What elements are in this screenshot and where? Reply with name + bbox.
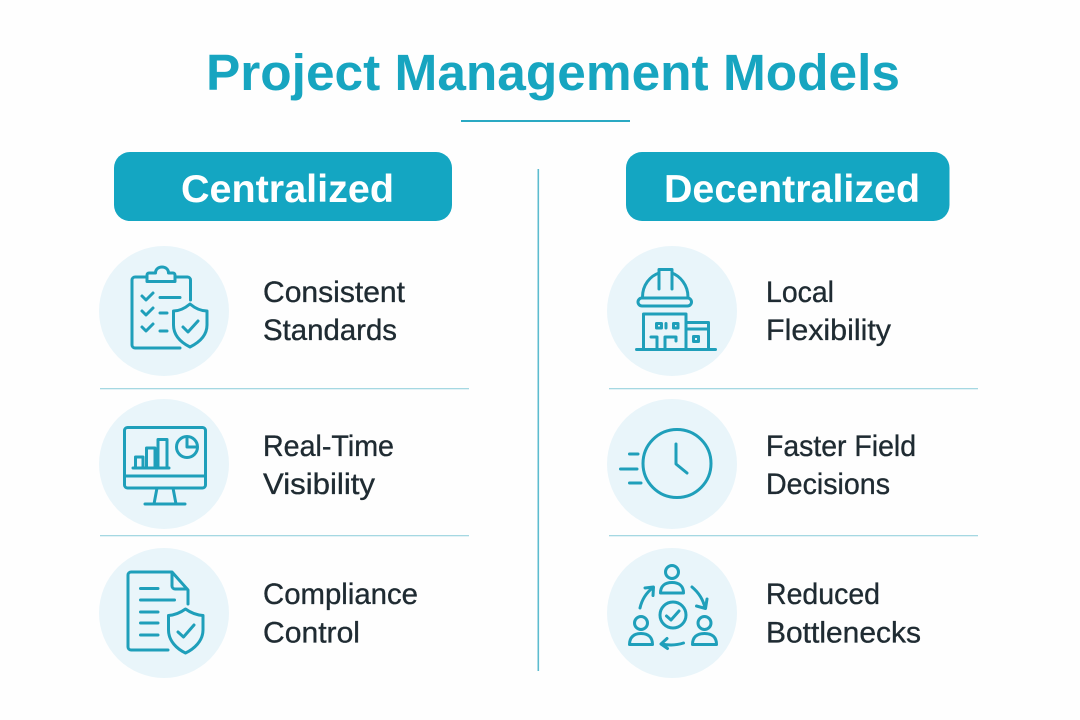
label: Standards bbox=[263, 314, 397, 347]
label bbox=[766, 430, 916, 501]
label: Reduced bbox=[766, 578, 880, 611]
label: Flexibility bbox=[766, 314, 891, 347]
item: faster field decisions bbox=[607, 399, 916, 529]
label bbox=[263, 276, 405, 347]
icon: hard hat and building bbox=[607, 246, 737, 376]
centre divider line bbox=[538, 169, 539, 671]
panel: centralized bbox=[99, 152, 469, 678]
title: Project Management Models bbox=[206, 44, 900, 101]
heading: decentralized: Decentralized bbox=[664, 168, 920, 211]
label: Bottlenecks bbox=[766, 616, 921, 650]
label: Decisions bbox=[766, 468, 890, 501]
heading: decentralized bbox=[626, 152, 950, 221]
heading: centralized: Centralized bbox=[181, 168, 394, 211]
label: Faster Field bbox=[766, 430, 916, 463]
heading: centralized bbox=[114, 152, 452, 221]
label: Control bbox=[263, 616, 360, 650]
item: consistent standards bbox=[99, 246, 405, 376]
label: Consistent bbox=[263, 276, 405, 309]
item: compliance control bbox=[99, 548, 418, 678]
item: real-time visibility bbox=[99, 399, 394, 529]
item: reduced bottlenecks bbox=[607, 548, 921, 678]
label bbox=[766, 276, 891, 347]
label bbox=[263, 578, 418, 650]
label bbox=[263, 430, 394, 501]
item: local flexibility bbox=[607, 246, 891, 376]
label: Compliance bbox=[263, 578, 418, 611]
panel: decentralized bbox=[607, 152, 978, 678]
label: Local bbox=[766, 276, 834, 309]
label bbox=[766, 578, 921, 650]
icon: clock with speed lines bbox=[607, 399, 737, 529]
label: Real-Time bbox=[263, 430, 394, 463]
title underline bbox=[461, 120, 630, 122]
icon: clipboard with shield bbox=[99, 246, 229, 376]
label: Visibility bbox=[263, 468, 375, 501]
icon: team cycle with check bbox=[607, 548, 737, 678]
icon: monitor dashboard bbox=[99, 399, 229, 529]
icon: document with shield bbox=[99, 548, 229, 678]
